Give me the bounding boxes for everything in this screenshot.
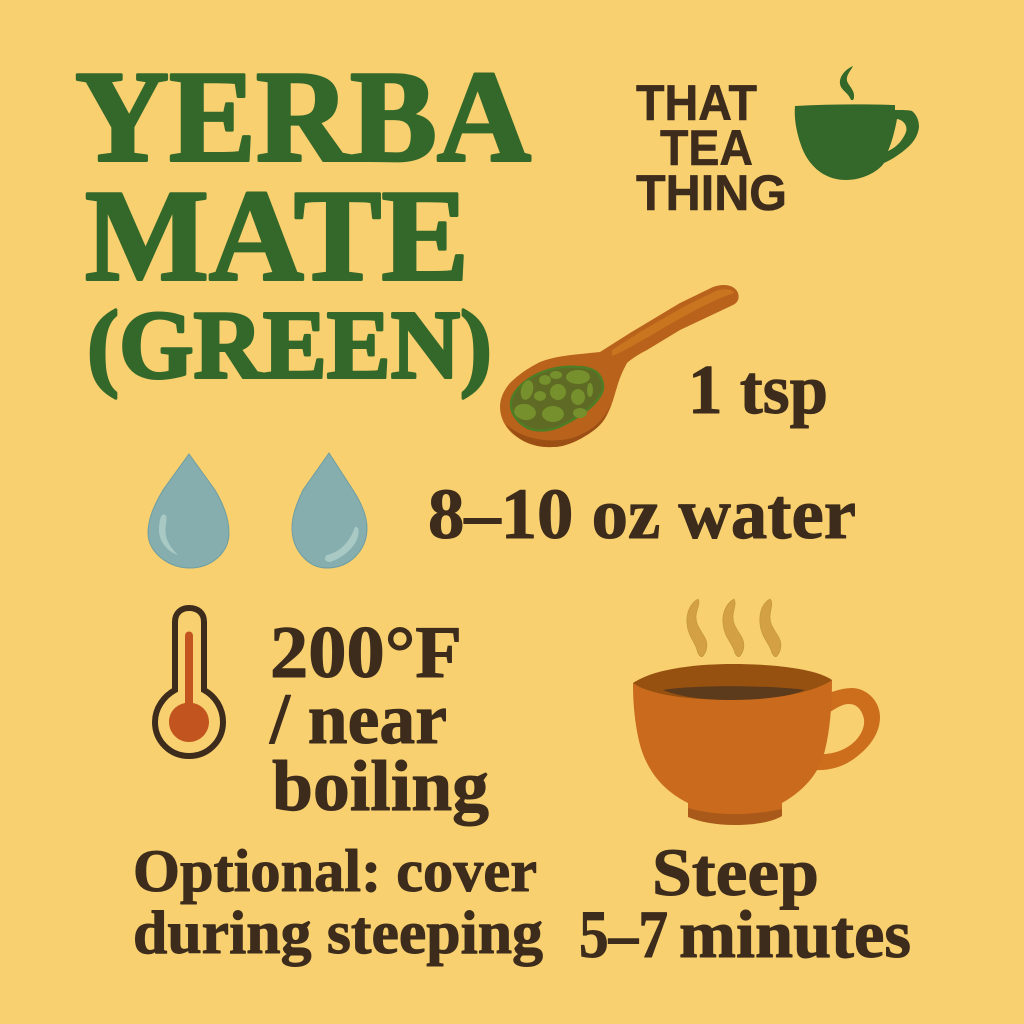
brand name: THING — [636, 165, 787, 221]
optional note — [133, 838, 543, 967]
temperature label: boiling — [272, 746, 489, 826]
icon: thermometer — [155, 608, 223, 756]
icon: orange cup — [633, 664, 880, 825]
title: (GREEN) — [87, 292, 492, 398]
temperature label: 200°F — [270, 612, 462, 694]
temperature label — [269, 612, 489, 826]
optional note: Optional: cover — [133, 838, 537, 904]
optional note: during steeping — [133, 900, 543, 967]
brand name: THAT — [636, 75, 757, 131]
steep time label — [579, 834, 911, 972]
brand name: TEA — [660, 120, 753, 176]
title — [75, 44, 531, 398]
amount label: 1 tsp — [688, 352, 828, 429]
icon: green teacup logo — [795, 66, 919, 180]
brand name — [636, 75, 787, 221]
steep time label: 5–7 — [579, 896, 668, 972]
title: YERBA — [75, 44, 531, 190]
icon: steam — [687, 599, 781, 657]
water label: 8–10 oz water — [428, 474, 856, 554]
title: MATE — [85, 164, 469, 308]
steep time label: Steep — [652, 834, 819, 910]
icon: water drop right — [292, 453, 367, 568]
icon: wooden spoon with yerba leaves — [500, 285, 739, 447]
temperature label: / near — [269, 679, 447, 759]
icon: water drop left — [148, 454, 229, 568]
steep time label: minutes — [679, 896, 911, 972]
